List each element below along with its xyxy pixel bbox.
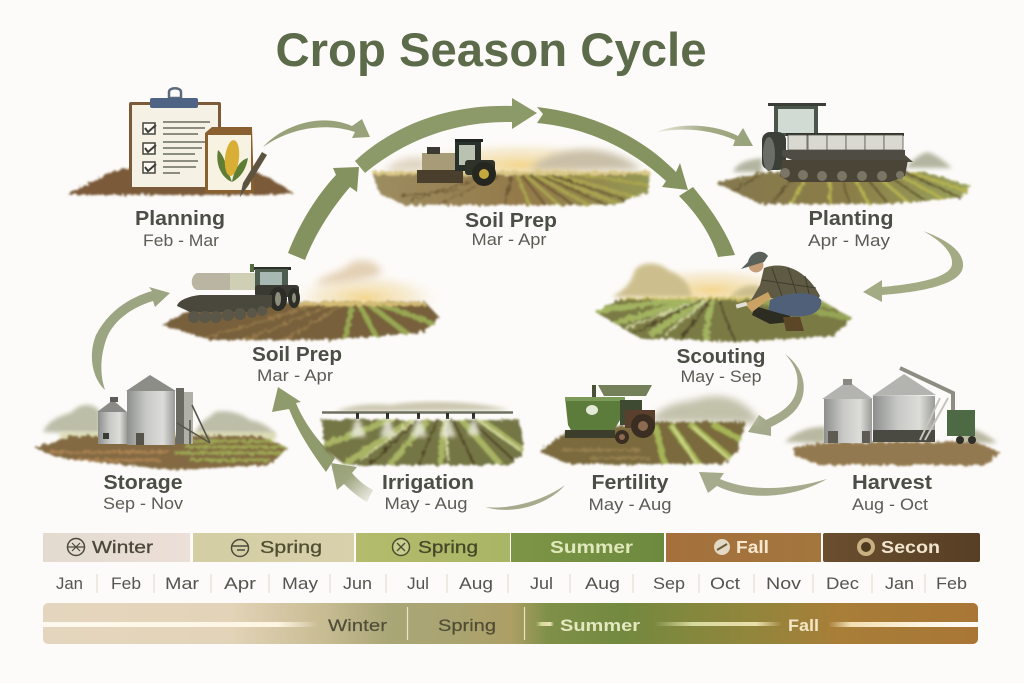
gradient season band — [43, 603, 979, 644]
field — [35, 436, 290, 470]
label: Soil Prep left: Soil Prep — [252, 343, 342, 366]
clouds — [315, 260, 382, 285]
sky glow — [400, 139, 640, 191]
scene: scouting — [590, 252, 860, 342]
month row: Nov — [766, 574, 802, 593]
arrow: lower up to soil prep — [272, 387, 335, 472]
label: Fertility: May - Aug — [588, 496, 672, 514]
season strip — [43, 533, 980, 562]
label: Fertility — [588, 471, 672, 514]
arrow: to planting — [657, 126, 753, 146]
gradient season band: Summer — [560, 616, 640, 635]
month row: Oct — [710, 574, 740, 593]
scene: planting — [716, 103, 985, 206]
tree line — [530, 150, 642, 170]
seed bag with corn — [205, 127, 254, 193]
soil — [792, 442, 1000, 465]
arrow: storage to soil prep — [92, 287, 170, 390]
arrow: planting to scouting — [863, 231, 963, 302]
month row: Aug — [585, 574, 620, 593]
label: Storage: Sep - Nov — [103, 495, 184, 513]
arrow: irrigation to lower left — [331, 463, 373, 502]
label: Irrigation: Irrigation — [382, 471, 474, 494]
label: Soil Prep top — [465, 209, 557, 249]
label: Scouting: Scouting — [676, 345, 766, 368]
haze left — [385, 157, 425, 172]
silos — [97, 375, 210, 445]
field — [540, 422, 750, 466]
scene: soil prep top — [372, 139, 680, 206]
arrow: fertility to irrigation — [485, 485, 565, 510]
label: Storage: Storage — [104, 471, 182, 494]
scene: fertility — [540, 385, 760, 466]
sunset glow — [285, 270, 445, 326]
tractor — [417, 139, 496, 186]
seed tractor — [177, 264, 300, 323]
month row: Jan — [885, 574, 914, 593]
pale ground — [60, 432, 275, 442]
segment: spring one — [193, 533, 354, 562]
field — [716, 170, 985, 206]
month row: Aug — [459, 574, 493, 593]
segment: spring one: Spring — [260, 537, 322, 557]
label: Planning: Planning — [135, 207, 225, 230]
month row: Jul — [407, 574, 429, 593]
trees — [612, 264, 768, 298]
segment: winter: Winter — [92, 537, 153, 557]
field — [372, 170, 680, 206]
segment: spring two — [356, 533, 510, 562]
month row: Sep — [653, 574, 685, 593]
month row: Dec — [826, 574, 860, 593]
distant trees — [335, 402, 510, 412]
label: Planning: Feb - Mar — [143, 232, 220, 250]
clipboard — [129, 88, 221, 190]
month row — [56, 574, 967, 593]
segment: spring two: Spring — [418, 537, 478, 557]
segment: secon: Secon — [881, 537, 940, 557]
month row: Apr — [224, 574, 256, 593]
month row: Jul — [530, 574, 553, 593]
label: Harvest: Aug - Oct — [852, 496, 928, 514]
gradient season band: Winter — [328, 616, 387, 635]
month row: Jun — [343, 574, 372, 593]
tree line — [650, 396, 760, 423]
segment: fall: Fall — [736, 537, 769, 557]
label: Fertility: Fertility — [592, 471, 669, 494]
label: Planting: Planting — [808, 207, 894, 230]
arrow: harvest to fertility — [699, 472, 827, 496]
label: Soil Prep top: Mar - Apr — [472, 231, 547, 249]
irrigation pipe and sprays — [322, 412, 513, 437]
label: Irrigation: May - Aug — [384, 495, 468, 513]
green applicator and tractor — [565, 385, 655, 444]
field — [590, 297, 860, 342]
gradient season band: Fall — [788, 616, 819, 635]
month row: Jan — [56, 574, 83, 593]
label: Planning — [135, 207, 225, 250]
label: Soil Prep left: Mar - Apr — [257, 367, 334, 385]
segment: winter — [43, 533, 190, 562]
scene: irrigation — [322, 402, 530, 466]
scene: planning — [67, 88, 293, 197]
label: Scouting: May - Sep — [680, 368, 762, 386]
background trees — [733, 152, 952, 172]
silos and auger — [822, 368, 976, 444]
label: Harvest — [852, 471, 932, 514]
label: Storage — [103, 471, 184, 513]
title: Crop Season Cycle — [276, 23, 706, 76]
segment: summer — [511, 533, 664, 562]
label: Soil Prep top: Soil Prep — [465, 209, 557, 232]
field — [162, 302, 440, 342]
label: Planting — [808, 207, 894, 250]
scene: soil prep left — [162, 260, 445, 342]
segment: summer: Summer — [550, 537, 633, 557]
label: Planting: Apr - May — [808, 232, 891, 250]
month row: Mar — [165, 574, 199, 593]
month row: Feb — [111, 574, 141, 593]
planter tractor — [762, 103, 913, 182]
month row: May — [282, 574, 319, 593]
segment: secon — [823, 533, 980, 562]
segment: fall — [666, 533, 821, 562]
trees — [43, 405, 276, 436]
farmer — [736, 252, 821, 331]
label: Harvest: Harvest — [852, 471, 932, 494]
label: Irrigation — [382, 471, 474, 513]
label: Scouting — [676, 345, 766, 386]
scene: storage — [35, 375, 290, 470]
arrow: planning to soil prep — [263, 119, 370, 147]
sky glow — [612, 264, 812, 316]
arrow: descending to scouting — [679, 187, 735, 257]
arrow: top arc — [355, 98, 537, 173]
arrow: left soil prep up to arc — [288, 167, 359, 260]
gradient season band: Spring — [438, 616, 496, 635]
label: Soil Prep left — [252, 343, 342, 385]
pencil — [240, 152, 267, 197]
soil mound — [67, 166, 293, 195]
month row: Feb — [936, 574, 967, 593]
arrow: scouting to fertility — [748, 354, 804, 436]
trees — [785, 425, 997, 443]
arrow: top arc descending — [537, 107, 688, 190]
field — [322, 418, 530, 466]
scene: harvest — [785, 368, 1000, 465]
